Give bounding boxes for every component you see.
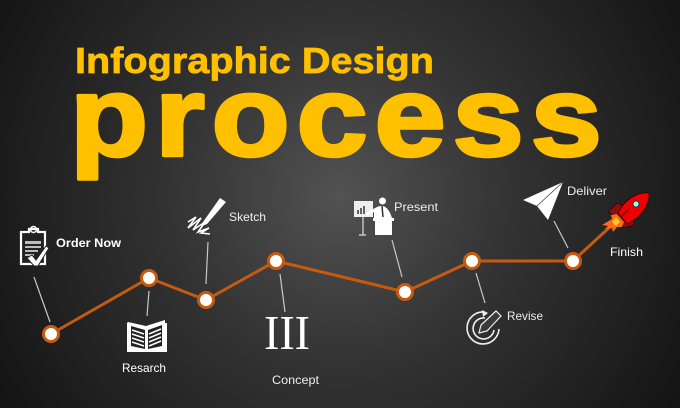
label: Resarch: Resarch xyxy=(122,361,166,375)
connector lines xyxy=(34,221,568,322)
timeline nodes xyxy=(44,254,580,342)
label: Order Now: Order Now xyxy=(56,236,122,250)
icon: roman numeral three: III xyxy=(264,305,310,360)
label: Revise: Revise xyxy=(507,309,543,323)
label: Finish: Finish xyxy=(610,245,643,259)
label: Concept: Concept xyxy=(272,373,320,387)
label: Sketch: Sketch xyxy=(229,210,266,224)
icon: paper plane xyxy=(523,182,563,220)
label: Deliver: Deliver xyxy=(567,184,607,198)
icon: revise cycle with pencil xyxy=(467,310,501,344)
title: process: process xyxy=(70,53,609,180)
icon: red rocket xyxy=(602,193,649,232)
icon: open book xyxy=(127,320,167,352)
icon: presenter at podium xyxy=(354,198,394,235)
icon: pencil sketch xyxy=(188,198,226,234)
icon: clipboard xyxy=(21,226,49,266)
process timeline xyxy=(44,225,612,342)
label: Present: Present xyxy=(394,200,439,214)
title: Infographic Design: Infographic Design xyxy=(75,40,434,81)
